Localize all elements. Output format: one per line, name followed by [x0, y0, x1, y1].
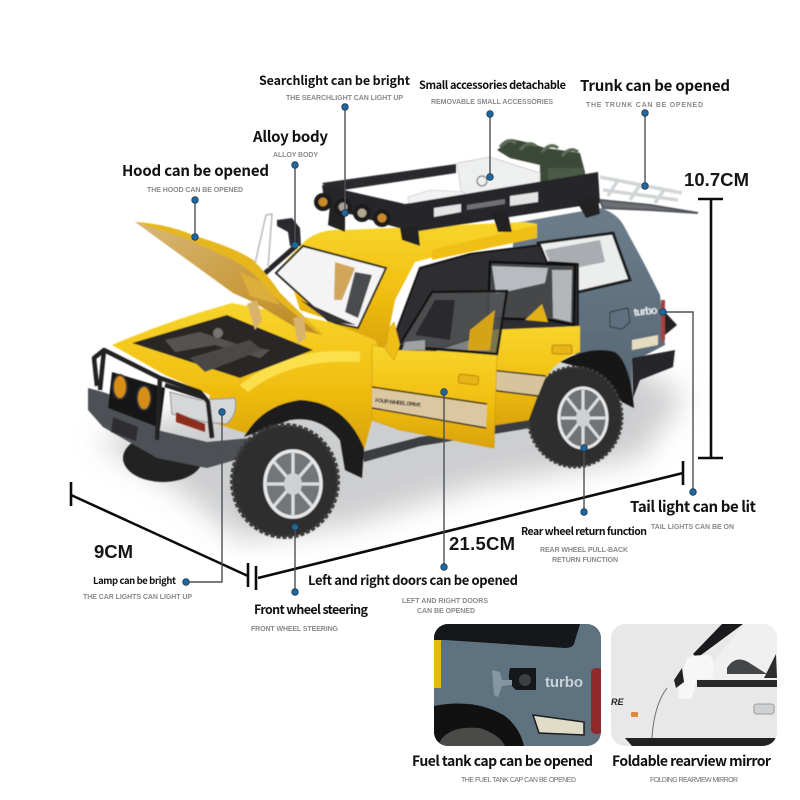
callout: lamp: THE CAR LIGHTS CAN LIGHT UP	[83, 594, 192, 601]
callout: tail light: TAIL LIGHTS CAN BE ON	[651, 524, 734, 531]
winch	[111, 417, 138, 441]
door handle	[458, 374, 479, 385]
caption: rearview mirror	[612, 751, 772, 784]
rear quarter window	[538, 233, 630, 297]
callout: small accessories: REMOVABLE SMALL ACCESSORIES	[431, 99, 553, 106]
callout: trunk: Trunk can be opened	[580, 75, 730, 96]
callout: rear wheel	[521, 445, 647, 564]
callout: small accessories: Small accessories detachable	[419, 77, 566, 93]
callout: front wheel: Front wheel steering	[254, 599, 369, 618]
callout: rear wheel: REAR WHEEL PULL-BACK	[540, 547, 628, 554]
window glass	[697, 624, 777, 680]
searchlights	[314, 193, 391, 227]
window sill	[697, 680, 777, 687]
dimension: height 10.7CM	[684, 169, 749, 458]
roof rack	[322, 172, 600, 246]
far front wheel	[123, 434, 203, 482]
callout: searchlight: Searchlight can be bright	[259, 70, 411, 89]
rear wheel	[528, 367, 622, 467]
wheel arch	[244, 400, 364, 478]
front door window frame	[399, 291, 507, 354]
pillar	[693, 624, 743, 658]
bottom sill	[625, 738, 777, 746]
callout: searchlight	[259, 70, 411, 216]
grey rear body	[500, 208, 665, 390]
dimension: length 21.5CM: 21.5CM	[449, 533, 515, 554]
front wheel	[232, 425, 338, 537]
yellow door edge	[434, 640, 441, 688]
infographic canvas	[70, 74, 777, 782]
callout: trunk	[580, 75, 730, 189]
window strip	[434, 624, 580, 648]
grille	[108, 372, 165, 428]
side cabin interior	[390, 245, 578, 352]
dimension: length 21.5CM	[256, 461, 683, 590]
panel: fuel tank cap detail	[434, 624, 603, 746]
snorkel	[264, 218, 301, 274]
rear door stripe	[490, 370, 546, 396]
turbo lettering: turbo	[545, 674, 583, 691]
open hood	[135, 222, 323, 344]
headlight	[170, 392, 236, 432]
callout: rear wheel: Rear wheel return function	[521, 524, 647, 539]
door mirror	[386, 322, 400, 360]
white roof boxes	[408, 157, 540, 214]
door line	[652, 688, 667, 738]
callout: hood	[122, 160, 269, 240]
callout: alloy body	[252, 126, 328, 248]
front door panel	[372, 345, 497, 448]
callout: tail light: Tail light can be lit	[630, 496, 757, 517]
bull bar	[94, 350, 212, 440]
rear wheel arch	[560, 350, 634, 408]
rear bumper	[632, 350, 675, 398]
turbo badge: turbo	[633, 305, 658, 319]
callout: doors	[308, 389, 518, 615]
callout: searchlight: THE SEARCHLIGHT CAN LIGHT UP	[286, 95, 403, 102]
yellow cab	[285, 222, 537, 350]
mirror frame	[254, 214, 272, 268]
fog lights	[113, 375, 151, 410]
callout: doors: Left and right doors can be opened	[308, 570, 518, 589]
callout: hood: Hood can be opened	[122, 160, 269, 181]
caption: fuel tank: THE FUEL TANK CAP CAN BE OPENED	[461, 777, 576, 784]
callout: lamp: Lamp can be bright	[93, 573, 176, 587]
door lettering: FOUR WHEEL DRIVE	[375, 398, 421, 409]
callout: hood: THE HOOD CAN BE OPENED	[147, 187, 243, 194]
panel: rearview mirror detail	[611, 624, 777, 746]
caption: fuel tank	[412, 751, 593, 784]
tail lamp	[591, 668, 601, 734]
mirror	[678, 655, 713, 699]
caption: fuel tank: Fuel tank cap can be opened	[412, 751, 593, 771]
rear door glass	[488, 262, 575, 325]
callout: alloy body: Alloy body	[252, 126, 328, 147]
callout: alloy body: ALLOY BODY	[273, 152, 318, 159]
dimension: height 10.7CM: 10.7CM	[684, 169, 749, 190]
marker light	[631, 712, 638, 717]
badge text: RE	[611, 697, 624, 707]
door handle	[754, 704, 774, 714]
front body	[112, 303, 385, 450]
body lower rear door	[488, 326, 580, 428]
engine bay	[132, 315, 313, 378]
car illustration	[88, 139, 698, 537]
bumper	[88, 388, 250, 468]
callout: rear wheel: RETURN FUNCTION	[552, 557, 618, 564]
callout: front wheel	[251, 524, 369, 633]
wheel arch	[434, 704, 524, 746]
fuel cap	[610, 308, 630, 329]
interior	[727, 660, 767, 674]
side sill	[362, 420, 530, 462]
callout: lamp	[83, 409, 225, 601]
caption: rearview mirror: FOLDING REARVIEW MIRROR	[650, 777, 738, 784]
roof side rail strip	[432, 225, 537, 260]
dimension: depth 9CM	[71, 482, 248, 587]
fuel cap	[509, 668, 536, 690]
callout: doors: LEFT AND RIGHT DOORS	[402, 598, 488, 605]
door stripe	[372, 388, 487, 428]
rear door handle	[552, 345, 572, 354]
fender highlight	[240, 351, 360, 392]
reflector	[533, 715, 584, 735]
dimension: depth 9CM: 9CM	[94, 541, 133, 562]
callout: trunk: THE TRUNK CAN BE OPENED	[586, 102, 703, 109]
jerry cans	[497, 139, 585, 182]
reflector plate	[632, 335, 658, 350]
callout: tail light	[630, 309, 757, 531]
callout: doors: CAN BE OPENED	[417, 608, 475, 615]
roof rack back rail	[322, 164, 456, 192]
hood supports	[247, 300, 262, 330]
callout: front wheel: FRONT WHEEL STEERING	[251, 626, 339, 633]
tail light	[661, 300, 665, 342]
rear trunk ladder	[600, 177, 698, 213]
ground shadow	[95, 350, 685, 540]
caption: rearview mirror: Foldable rearview mirror	[612, 751, 772, 771]
windscreen	[276, 246, 386, 328]
callout: small accessories	[419, 77, 566, 180]
